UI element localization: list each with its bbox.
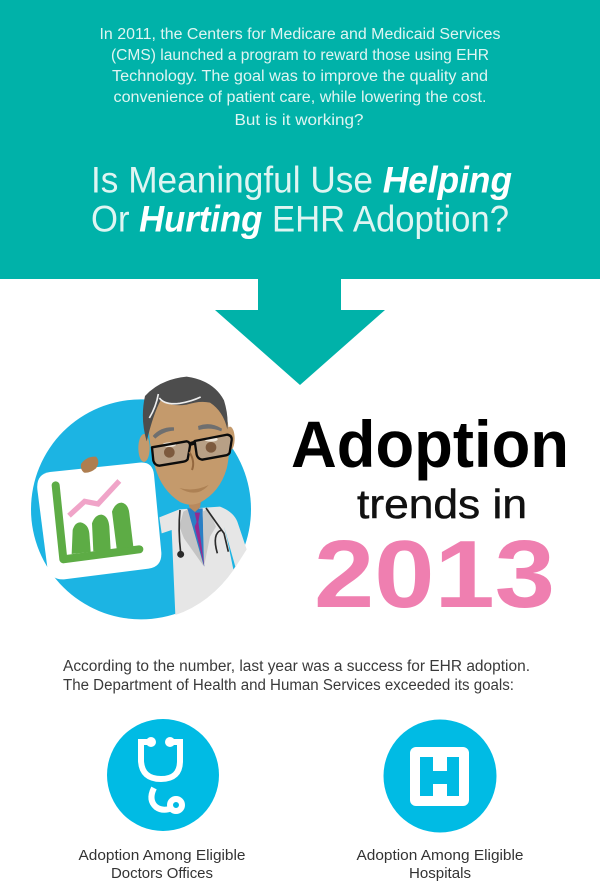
main title: Is Meaningful Use Helping <box>91 160 512 200</box>
body text: The Department of Health and Human Services exceeded its goals: <box>63 677 514 694</box>
chart card <box>37 463 161 579</box>
intro paragraph: But is it working? <box>234 112 364 129</box>
hand <box>81 457 98 473</box>
label: doctors offices <box>78 848 246 881</box>
icon: hospital <box>384 720 496 832</box>
label: hospitals: Adoption Among Eligible <box>356 848 524 864</box>
collar and tie <box>179 508 216 567</box>
intro paragraph: In 2011, the Centers for Medicare and Medicaid Services <box>100 26 501 43</box>
panel: teal header <box>0 0 600 279</box>
heading: adoption trends in 2013: 2013 <box>314 521 555 628</box>
ears <box>138 434 150 462</box>
body text <box>63 658 530 694</box>
eyebrows <box>153 427 174 439</box>
intro paragraph <box>100 26 501 129</box>
label: hospitals <box>356 848 524 881</box>
glasses lenses and eyes <box>153 442 190 465</box>
intro paragraph: (CMS) launched a program to reward those using EHR <box>111 47 489 64</box>
body text: According to the number, last year was a success for EHR adoption. <box>63 658 530 675</box>
heading: adoption trends in 2013: trends in <box>357 481 527 527</box>
icon: stethoscope <box>107 719 219 831</box>
main title: Or Hurting EHR Adoption? <box>91 198 509 240</box>
main title <box>91 160 512 240</box>
glasses frame <box>152 435 232 466</box>
doctor illustration <box>31 377 251 619</box>
heading: adoption trends in 2013 <box>291 407 569 628</box>
chart icon <box>56 481 139 559</box>
label: doctors offices: Adoption Among Eligible <box>78 848 246 864</box>
coat <box>159 507 247 615</box>
neck <box>188 497 202 512</box>
nose and mouth <box>189 452 193 470</box>
blue circle <box>31 399 251 619</box>
intro paragraph: convenience of patient care, while lowering the cost. <box>114 89 486 106</box>
heading: adoption trends in 2013: Adoption <box>291 407 569 481</box>
head <box>138 377 235 505</box>
intro paragraph: Technology. The goal was to improve the quality and <box>112 68 488 85</box>
hair <box>143 377 228 441</box>
face <box>148 395 229 505</box>
arrow pointing down <box>215 278 385 385</box>
stethoscope <box>178 508 228 557</box>
